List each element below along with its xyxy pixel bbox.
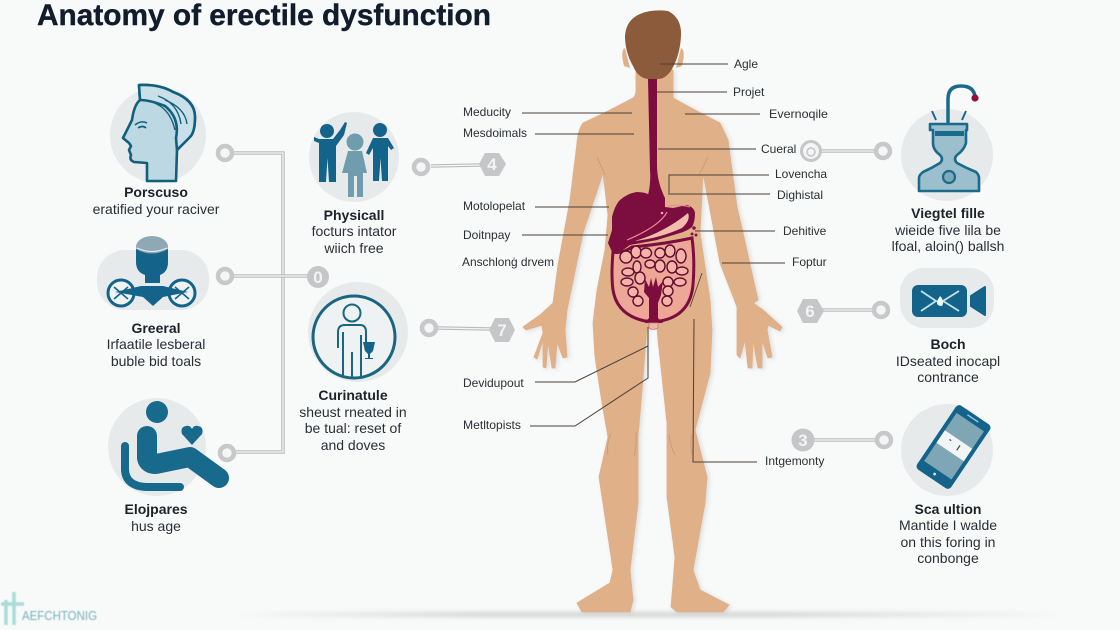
label: Dehitive	[695, 224, 827, 238]
description: and doves	[321, 437, 385, 453]
description	[299, 404, 407, 453]
figure: ears	[622, 48, 684, 68]
icon: head profile	[110, 85, 206, 183]
description: Mantide I walde	[899, 517, 997, 533]
description: buble bid toals	[111, 353, 201, 369]
heading: Greeral	[131, 320, 181, 336]
anatomical body figure	[523, 10, 782, 612]
description: contrance	[917, 369, 979, 385]
figure: hair and head	[625, 10, 681, 79]
organ: stomach	[608, 192, 698, 252]
connector: Sca ultion to badge 3	[792, 428, 891, 452]
label: Dighistal: Dighistal	[777, 188, 823, 202]
connector: Greeral to badge 0	[218, 266, 329, 288]
description	[899, 517, 997, 566]
heading: Physicall	[324, 207, 384, 223]
label: Agle: Agle	[734, 57, 758, 71]
heading: Viegtel fille	[911, 205, 985, 221]
label: Intgemonty	[693, 319, 824, 468]
footer logo: AEFCHTONIG	[22, 609, 97, 623]
panel: Elojpares	[108, 398, 219, 534]
connector: left bracket linking Porscuso and Elojpares	[218, 146, 283, 460]
icon: smartphone	[901, 404, 993, 496]
label: Dehitive: Dehitive	[783, 224, 827, 238]
connector: Greeral to badge 0: 0	[313, 268, 323, 287]
description: focturs intator	[312, 223, 397, 239]
heading: Elojpares	[124, 501, 188, 517]
panel: Boch	[896, 268, 1000, 385]
label: Meducity: Meducity	[463, 105, 511, 119]
label: Doitnpay: Doitnpay	[463, 228, 510, 242]
icon: person in ring with cup	[308, 282, 408, 382]
icon: seated person with heart	[108, 398, 219, 496]
labels: left column	[462, 105, 648, 432]
description: on this foring in	[901, 534, 995, 550]
description: wiich free	[323, 240, 384, 256]
label: Cueral: Cueral	[761, 142, 796, 156]
heading: Porscuso	[124, 184, 188, 200]
label: Metltopists: Metltopists	[463, 418, 521, 432]
icon: head with wheels	[97, 236, 209, 310]
panel: Physicall	[309, 112, 399, 256]
description: sheust rneated in	[299, 404, 407, 420]
description	[107, 336, 205, 369]
label: Lovencha	[669, 167, 827, 193]
description: IDseated inocapl	[896, 353, 1000, 369]
description: Irfaatile lesberal	[107, 336, 205, 352]
label: Projet: Projet	[733, 85, 765, 99]
icon: three people	[309, 112, 399, 202]
heading: Sca ultion	[915, 501, 981, 517]
icon: faucet and basin	[901, 86, 993, 201]
connector: Physicall to badge 4: 4	[487, 155, 497, 174]
labels: right column	[657, 57, 828, 468]
label: Devidupout: Devidupout	[463, 376, 524, 390]
panel: Curinatule	[299, 282, 408, 453]
panel: Sca ultion	[899, 404, 997, 566]
description: lfoal, aloin() ballsh	[892, 238, 1004, 254]
label: Intgemonty: Intgemonty	[765, 454, 824, 468]
description	[892, 222, 1004, 254]
connector: Curinatule to badge 7: 7	[497, 321, 507, 340]
label: Anschlong drvem: Anschlonġ drvem	[462, 255, 554, 269]
description: be tual: reset of	[305, 420, 401, 436]
label: Foptur	[722, 255, 827, 269]
description: wieide five lila be	[894, 222, 1001, 238]
label: Projet	[657, 85, 765, 99]
label: Mesdoimals: Mesdoimals	[463, 126, 527, 140]
label: Metltopists	[463, 327, 648, 432]
heading: Curinatule	[318, 387, 388, 403]
description: conbonge	[917, 550, 979, 566]
heading: Boch	[930, 336, 966, 352]
description: hus age	[131, 518, 181, 534]
organ: intestines	[612, 238, 694, 330]
description: eratified your raciver	[93, 201, 220, 217]
connector: Boch to badge 6	[797, 299, 888, 323]
lines: pointer line from intestine	[690, 273, 702, 307]
label: Devidupout	[463, 346, 648, 390]
panel: Greeral	[97, 236, 209, 369]
description	[896, 353, 1000, 385]
connector: Sca ultion to badge 3: 3	[798, 431, 808, 450]
label: Foptur: Foptur	[792, 255, 827, 269]
label: Lovencha: Lovencha	[775, 167, 827, 181]
label: Cueral	[658, 142, 796, 156]
panel: Viegtel fille	[892, 86, 1004, 254]
label: Agle	[660, 57, 758, 71]
connector: Viegtel to badge	[802, 142, 890, 160]
connector: Boch to badge 6: 6	[805, 302, 815, 321]
label: Motolopelat: Motolopelat	[463, 199, 526, 213]
connector: Physicall to badge 4	[414, 153, 506, 176]
organ: esophagus	[648, 79, 665, 210]
connector: Curinatule to badge 7	[422, 318, 515, 342]
figure: skin silhouette	[523, 70, 782, 612]
description	[312, 223, 397, 256]
panel: Porscuso	[93, 85, 220, 217]
label: Evernoqile: Evernoqile	[769, 107, 828, 121]
figure: armpit and knee creases	[597, 157, 708, 456]
icon: video camera	[900, 268, 994, 328]
footer logo	[1, 592, 97, 625]
